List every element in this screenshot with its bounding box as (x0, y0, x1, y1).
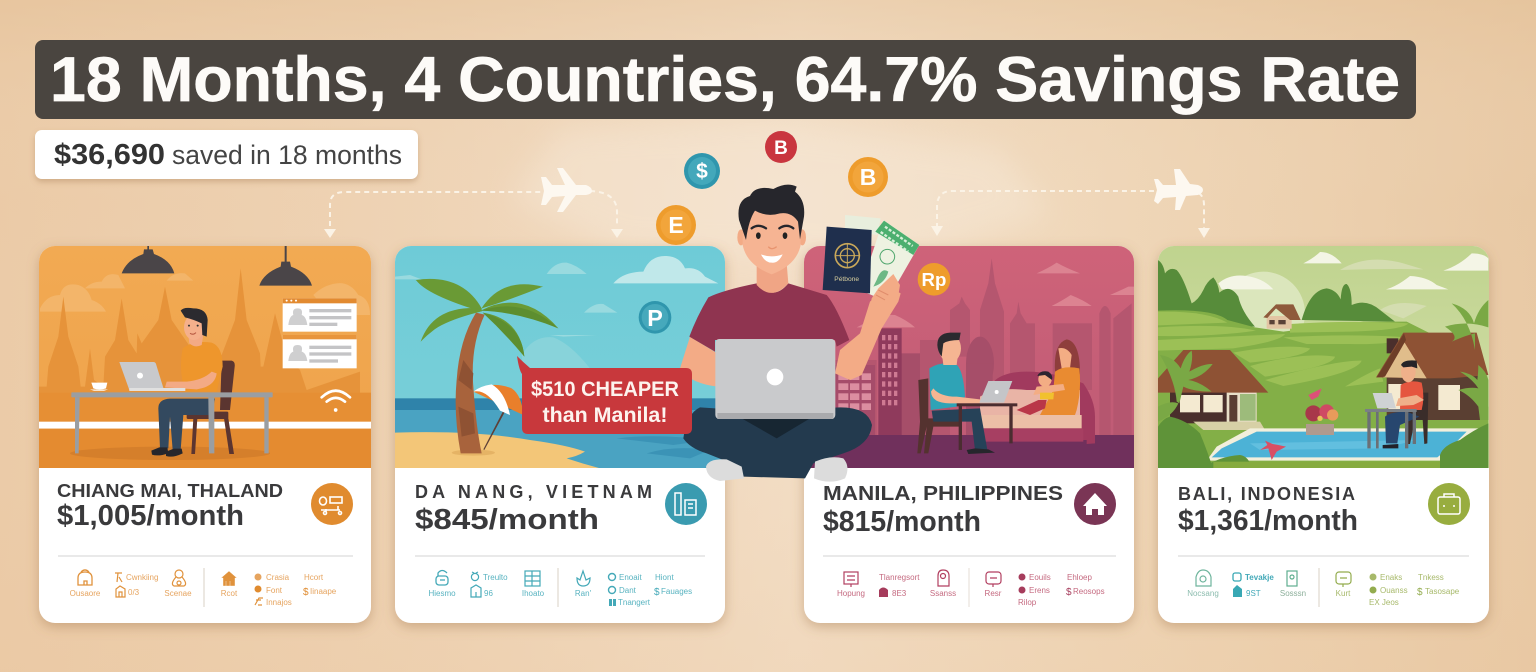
cost breakdown row: $ (1066, 587, 1072, 598)
cost breakdown row: 8E3 (892, 589, 907, 598)
palm tree (415, 279, 558, 453)
cost breakdown row: Ousaore (70, 589, 101, 598)
cost breakdown row: Crasia (266, 573, 290, 582)
hillside hut (1263, 304, 1301, 329)
cost breakdown row: Kurt (1336, 589, 1351, 598)
callout: $510 cheaper than Manila: $510 CHEAPER (531, 378, 679, 401)
cost breakdown row: Resr (985, 589, 1002, 598)
cost breakdown row: Tlanregsort (879, 573, 920, 582)
cost breakdown row: Sosssn (1280, 589, 1306, 598)
illustration: beach with palm tree (393, 243, 727, 470)
seated worker (151, 308, 223, 457)
cost breakdown row: Ran' (575, 589, 592, 598)
cost breakdown row: Erens (1029, 586, 1050, 595)
monthly cost: $1,361/month (1178, 505, 1358, 537)
coin: dollar (684, 153, 720, 189)
cost breakdown row: $ (1417, 587, 1423, 598)
subtitle pill: total saved: $36,690 (54, 139, 165, 171)
cost breakdown row: Scenae (164, 589, 192, 598)
cost breakdown row: Fauages (661, 587, 692, 596)
cost breakdown row: $ (654, 587, 660, 598)
cost breakdown row: Eouils (1029, 573, 1051, 582)
subtitle pill: total saved (35, 130, 418, 179)
panel: Chiang Mai, Thailand (37, 243, 373, 623)
cost breakdown row (1187, 570, 1460, 607)
cost breakdown row: Innajos (266, 598, 292, 607)
flight path arrow: Chiang Mai to Da Nang (324, 168, 623, 238)
forested hills (1158, 260, 1395, 327)
coin: rupiah (918, 263, 950, 296)
monthly cost: $845/month (415, 504, 599, 536)
cost breakdown row: Dant (619, 586, 637, 595)
cost breakdown row: Hiont (655, 573, 674, 582)
icon: home badge (1074, 483, 1116, 525)
illustration: family in city skyline (802, 243, 1138, 470)
laptop on table (957, 381, 1017, 450)
flowers (1305, 388, 1338, 421)
cost breakdown row: Tevakje (1245, 573, 1274, 582)
browser windows (283, 298, 357, 368)
left arm (680, 337, 717, 387)
passport: Pétbone (834, 276, 859, 283)
laptop and desk (71, 362, 273, 453)
hand gripping documents (867, 274, 900, 328)
cost breakdown row: Enaks (1380, 573, 1402, 582)
coin: peso: P (647, 305, 663, 331)
illustration: rice terraces and pool villa (1155, 243, 1492, 470)
central character: digital nomad with laptop and passport (680, 185, 919, 482)
cost breakdown row: Nocsang (1187, 589, 1219, 598)
raised arm (835, 287, 901, 380)
cost breakdown row: Reosops (1073, 587, 1105, 596)
neck and head (737, 185, 806, 293)
coin: euro (656, 205, 696, 245)
crossed legs (683, 407, 872, 482)
cost breakdown row (70, 570, 337, 607)
cost breakdown row: Font (266, 586, 283, 595)
cost breakdown row: Ihoato (522, 589, 545, 598)
location heading: BALI, INDONESIA (1178, 484, 1355, 504)
pool (1207, 424, 1478, 461)
location heading: CHIANG MAI, THALAND (57, 481, 283, 501)
icon: suitcase badge (1428, 483, 1470, 525)
coin: euro: E (668, 212, 684, 238)
icon: documents badge (665, 483, 707, 525)
cost breakdown row: 0/3 (128, 588, 140, 597)
cost breakdown row (837, 570, 1105, 607)
cost breakdown row: Tnangert (618, 598, 651, 607)
cost breakdown row: Tasosape (1425, 587, 1460, 596)
icon: hanging lamps (122, 246, 312, 286)
cost breakdown row: Rilop (1018, 598, 1037, 607)
cost breakdown row: Hcort (304, 573, 324, 582)
laptop (715, 339, 835, 419)
sofa with mother and child (980, 339, 1095, 444)
coin: peso (639, 301, 671, 334)
shirt (689, 283, 849, 352)
cost breakdown row: Ssanss (930, 589, 956, 598)
location heading: DA NANG, VIETNAM (415, 482, 652, 502)
chair (187, 361, 235, 454)
coin: dollar: $ (696, 160, 708, 183)
coin: baht red (765, 131, 797, 163)
foliage (1158, 300, 1488, 422)
seated man at laptop (917, 333, 995, 454)
panel: Da Nang, Vietnam (393, 243, 727, 623)
icon: cart badge (311, 483, 353, 525)
monthly cost: $1,005/month (57, 500, 244, 532)
villa left (1158, 350, 1268, 430)
cost breakdown row (428, 570, 692, 607)
coin: baht orange (848, 157, 888, 197)
passport (823, 227, 872, 293)
visa documents (845, 215, 919, 302)
cost breakdown row: Cwnkiing (126, 573, 158, 582)
cost breakdown row: Hopung (837, 589, 865, 598)
illustration: coworking space with temples (37, 243, 373, 470)
title banner: 18 Months, 4 Countries, 64.7% Savings Rate (50, 45, 1400, 115)
flight path arrow: Manila to Bali (931, 169, 1210, 238)
subtitle pill: total saved: saved in 18 months (172, 140, 402, 170)
cost breakdown row: EX Jeos (1369, 598, 1399, 607)
callout: $510 cheaper than Manila: than Manila! (542, 404, 668, 427)
panel: Manila, Philippines (802, 243, 1138, 623)
cost breakdown row: 9ST (1246, 589, 1261, 598)
coin: baht orange: B (860, 164, 876, 190)
cost breakdown row: Ehloep (1067, 573, 1092, 582)
cost breakdown row: Enoait (619, 573, 642, 582)
location heading: MANILA, PHILIPPINES (823, 483, 1063, 505)
umbrella (473, 384, 523, 450)
terraces (1158, 310, 1488, 470)
icon: wifi (322, 391, 350, 411)
villa right (1376, 333, 1488, 420)
monthly cost: $815/month (823, 506, 981, 538)
coin: baht red: B (774, 138, 788, 159)
cost breakdown row: 96 (484, 589, 493, 598)
cost breakdown row: Treulto (483, 573, 508, 582)
remote worker at poolside (1365, 360, 1428, 448)
cost breakdown row: Rcot (221, 589, 238, 598)
cost breakdown row: Tnkess (1418, 573, 1444, 582)
cost breakdown row: Hiesmo (428, 589, 456, 598)
panel: Bali, Indonesia (1155, 243, 1492, 623)
callout: $510 cheaper than Manila (517, 356, 692, 434)
cost breakdown row: Ouanss (1380, 586, 1408, 595)
cost breakdown row: $ (303, 587, 309, 598)
office blocks (835, 328, 902, 435)
cost breakdown row: Iinaape (310, 587, 337, 596)
coin: rupiah: Rp (922, 269, 946, 290)
